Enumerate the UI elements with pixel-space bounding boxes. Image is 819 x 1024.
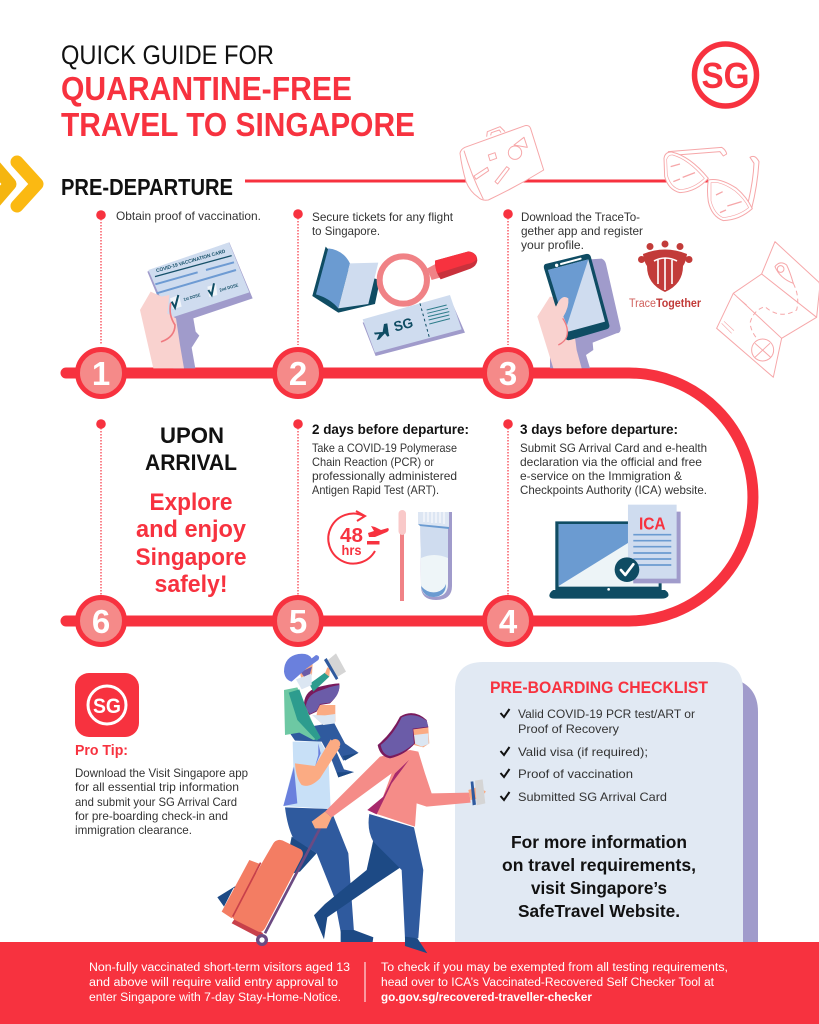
footer divider xyxy=(364,962,366,1002)
more information callout xyxy=(502,832,696,921)
icon: decorative map xyxy=(717,242,819,377)
panel: pro tip: immigration clearance. xyxy=(75,823,192,837)
step 4 text xyxy=(503,419,707,596)
more information callout: For more information xyxy=(511,832,687,852)
woman back leg xyxy=(314,840,402,939)
panel: pro tip: Pro Tip: xyxy=(75,743,128,759)
step 2 text: Secure tickets for any flight xyxy=(312,210,454,224)
upon arrival text: Singapore xyxy=(136,544,246,571)
step 5 text: 2 days before departure: xyxy=(312,421,469,437)
icon: Visit Singapore app xyxy=(75,673,139,737)
man head xyxy=(316,705,335,725)
footer band xyxy=(0,942,819,1024)
upon arrival text: UPON xyxy=(160,423,224,448)
title: QUICK GUIDE FOR xyxy=(61,40,274,70)
step 5 text: Take a COVID-19 Polymerase xyxy=(312,441,457,455)
more information callout: on travel requirements, xyxy=(502,855,696,875)
child head and cap xyxy=(301,667,312,677)
footer right text: head over to ICA’s Vaccinated-Recovered Self Checker Tool at xyxy=(381,977,715,989)
checklist items xyxy=(500,707,695,804)
man front leg xyxy=(285,807,354,932)
footer right text xyxy=(381,962,728,1004)
icon: 48 hours clock: 48 xyxy=(340,525,363,547)
more information callout: visit Singapore’s xyxy=(531,878,667,898)
icon: passport, magnifier and ticket: SG xyxy=(392,314,415,335)
woman sweater xyxy=(325,750,471,827)
icon: TraceTogether logo: TraceTogether xyxy=(629,298,701,310)
icon: vaccination card in hand xyxy=(140,242,253,368)
step 4 text: declaration via the official and free xyxy=(520,455,702,469)
checklist items: Valid COVID-19 PCR test/ART or xyxy=(518,707,695,721)
checklist items: Proof of vaccination xyxy=(518,767,633,781)
man shirt xyxy=(283,742,331,809)
more information callout: SafeTravel Website. xyxy=(518,901,680,921)
heading rule xyxy=(245,180,710,182)
footer right text: To check if you may be exempted from all testing requirements, xyxy=(381,962,728,974)
title xyxy=(61,40,415,143)
checklist items: Proof of Recovery xyxy=(518,722,619,736)
checklist items: Valid visa (if required); xyxy=(518,745,648,759)
step 5 text: Chain Reaction (PCR) or xyxy=(312,455,434,469)
icon: SG logo: SG xyxy=(702,55,750,96)
icon: vaccination card in hand: 2nd DOSE xyxy=(219,282,239,293)
upon arrival text: and enjoy xyxy=(136,516,247,543)
man back leg xyxy=(217,837,317,907)
panel: pro tip: and submit your SG Arrival Card xyxy=(75,795,237,809)
footer left text xyxy=(89,962,350,1004)
step 1 text: Obtain proof of vaccination. xyxy=(116,209,261,223)
route line xyxy=(66,373,753,621)
panel: pro tip: Download the Visit Singapore app xyxy=(75,766,248,780)
step 2 text: to Singapore. xyxy=(312,224,380,238)
step 5 text xyxy=(293,419,469,596)
icon: TraceTogether logo xyxy=(629,240,701,310)
icon: yellow chevrons xyxy=(0,162,37,206)
step 4 text: e-service on the Immigration & xyxy=(520,469,682,483)
icon: laptop with ICA document xyxy=(549,505,681,599)
title: TRAVEL TO SINGAPORE xyxy=(61,106,415,143)
upon arrival text xyxy=(136,423,247,598)
step 2 text xyxy=(293,209,454,345)
icon: vaccination card in hand: 1st DOSE xyxy=(183,292,201,302)
icon: phone in hand xyxy=(537,254,621,368)
upon arrival text: Explore xyxy=(150,489,232,516)
icon: vaccination card in hand: COVID-19 VACCINATION CARD xyxy=(156,249,226,274)
footer left text: Non-fully vaccinated short-term visitors aged 13 xyxy=(89,962,350,974)
step 5 text: professionally administered xyxy=(312,469,457,483)
title: QUARANTINE-FREE xyxy=(61,70,352,107)
step number badges xyxy=(78,350,532,644)
icon: test swab xyxy=(398,510,406,601)
step number badges: 5 xyxy=(289,603,307,640)
footer left text: and above will require valid entry approval to xyxy=(89,977,338,989)
panel: pro tip: for pre-boarding check-in and xyxy=(75,809,228,823)
step 5 text: Antigen Rapid Test (ART). xyxy=(312,483,439,497)
checklist items: Submitted SG Arrival Card xyxy=(518,790,667,804)
icon: test tube xyxy=(418,512,452,600)
child torso xyxy=(284,687,320,740)
panel: pro tip xyxy=(75,673,248,837)
step number badges: 2 xyxy=(289,355,307,392)
step 1 text xyxy=(96,209,261,345)
step 3 text xyxy=(503,209,643,345)
icon: Visit Singapore app: SG xyxy=(93,695,121,718)
panel: pro tip: for all essential trip information xyxy=(75,780,239,794)
step number badges: 1 xyxy=(92,355,110,392)
icon: passport, magnifier and ticket xyxy=(312,247,477,356)
child arm and mask xyxy=(309,673,329,692)
child legs xyxy=(290,723,358,777)
step 3 text: Download the TraceTo- xyxy=(521,210,640,224)
icon: laptop with ICA document: ICA xyxy=(639,513,666,533)
suitcase xyxy=(265,828,320,933)
heading: pre-departure: PRE-DEPARTURE xyxy=(61,174,233,200)
woman hand xyxy=(312,812,332,828)
icon: 48 hours clock xyxy=(328,511,389,564)
step 3 text: your profile. xyxy=(521,238,584,252)
upon arrival text: ARRIVAL xyxy=(145,450,237,475)
woman front leg xyxy=(369,814,423,938)
icon: decorative sunglasses xyxy=(664,147,759,221)
man arm xyxy=(295,739,340,786)
panel: pre-boarding checklist: PRE-BOARDING CHECKLIST xyxy=(490,679,708,697)
step number badges: 6 xyxy=(92,603,110,640)
step 4 text: Submit SG Arrival Card and e-health xyxy=(520,441,707,455)
illustration: travelling family xyxy=(217,653,486,953)
step 3 text: gether app and register xyxy=(521,224,643,238)
step number badges: 4 xyxy=(499,603,518,640)
icon: SG logo xyxy=(694,44,756,106)
step 4 text: 3 days before departure: xyxy=(520,421,678,437)
footer left text: enter Singapore with 7-day Stay-Home-Notice. xyxy=(89,992,341,1004)
woman phone xyxy=(475,779,485,805)
icon: decorative suitcase xyxy=(460,125,544,200)
woman head and hair xyxy=(413,727,429,747)
child phone xyxy=(327,653,346,677)
upon arrival text: safely! xyxy=(154,571,228,598)
panel: pre-boarding checklist xyxy=(455,662,758,945)
step number badges: 3 xyxy=(499,355,517,392)
footer right text: go.gov.sg/recovered-traveller-checker xyxy=(381,992,593,1004)
step 6 marker xyxy=(96,419,106,596)
step 4 text: Checkpoints Authority (ICA) website. xyxy=(520,483,707,497)
icon: 48 hours clock: hrs xyxy=(342,542,362,558)
